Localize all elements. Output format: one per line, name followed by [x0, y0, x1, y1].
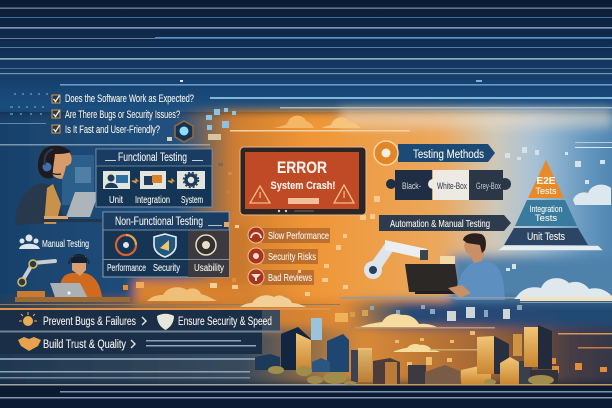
robot arm — [17, 260, 55, 299]
puzzle piece: grey-box: Grey-Box — [476, 181, 501, 191]
icon: bug burst — [19, 312, 37, 326]
puzzle: testing methods — [386, 170, 511, 200]
pyramid tier: integration: Integration — [530, 204, 562, 215]
icon: handshake — [18, 337, 41, 351]
checklist item 3 — [52, 124, 160, 136]
pyramid: test levels — [499, 160, 602, 250]
checklist item 2: Are There Bugs or Security Issues? — [65, 109, 180, 121]
data squares: center — [232, 196, 380, 296]
risk: bad reviews: Bad Reviews — [268, 272, 312, 284]
icon: performance gauge — [116, 235, 136, 255]
label: performance: Performance — [107, 263, 146, 274]
icon: integration — [140, 171, 166, 189]
data squares: center left — [123, 163, 236, 290]
manual testing label: Manual Testing — [42, 238, 89, 250]
manual testing label — [19, 234, 89, 250]
lower band — [0, 304, 340, 354]
label: security: Security — [153, 263, 180, 274]
pyramid tier: integration: Tests — [535, 213, 557, 224]
icon: orange gear badge — [374, 141, 398, 165]
cloud: left orange — [147, 287, 217, 301]
illustration: woman with headset at laptop — [15, 146, 102, 225]
puzzle piece: white-box: White-Box — [437, 181, 467, 191]
automation and manual testing banner — [379, 215, 511, 231]
label: usability: Usability — [194, 263, 224, 274]
benefit: prevent bugs and failures — [19, 312, 146, 328]
heading: functional testing: Functional Testing — [118, 152, 187, 164]
benefit: ensure security and speed: Ensure Security & Speed — [178, 316, 272, 328]
icon: security shield — [154, 234, 176, 257]
label: integration: Integration — [135, 195, 170, 206]
testing methods banner: Testing Methods — [413, 149, 484, 161]
trees — [268, 366, 554, 385]
data squares: lower — [335, 305, 522, 322]
pyramid tier: integration — [515, 200, 577, 226]
cloud: city — [394, 344, 440, 352]
error screen — [240, 147, 366, 215]
checklist item 1 — [52, 93, 194, 105]
illustration: robot arm and laptop — [364, 240, 471, 294]
icon: hexagon chip and data squares — [167, 108, 236, 142]
chevron — [131, 340, 135, 348]
benefit: build trust and quality: Build Trust & Quality — [43, 339, 126, 351]
panel: functional testing — [96, 149, 212, 207]
chevron — [142, 317, 146, 325]
data squares: right — [505, 142, 612, 271]
laptop — [405, 264, 459, 292]
clouds: top orange — [230, 116, 410, 132]
icon: warning left — [250, 186, 270, 203]
icon: unit — [103, 171, 130, 189]
puzzle piece: black-box: Black- — [402, 181, 421, 191]
risk: slow performance: Slow Performance — [268, 230, 329, 242]
label: system: System — [181, 195, 203, 206]
lower right rules — [340, 297, 612, 348]
question checklist — [52, 93, 194, 136]
clouds: right — [514, 185, 612, 301]
benefit: build trust and quality — [18, 337, 135, 351]
label: unit: Unit — [109, 195, 123, 206]
icon: system gear — [177, 171, 205, 189]
testing methods banner — [374, 141, 495, 165]
pyramid tier: e2e: E2E — [537, 176, 556, 187]
buildings: center and right — [268, 325, 558, 385]
robot arm — [364, 240, 428, 279]
benefit: ensure security and speed — [157, 314, 272, 330]
pyramid tier: e2e — [528, 160, 564, 198]
automation and manual testing banner: Automation & Manual Testing — [390, 218, 490, 230]
blue band rule — [0, 144, 210, 146]
cloud: lower center orange — [240, 295, 306, 307]
risk: security risks: Security Risks — [268, 251, 316, 263]
pyramid tier: unit: Unit Tests — [527, 231, 565, 243]
desk — [15, 297, 130, 302]
benefit: prevent bugs and failures: Prevent Bugs & Failures — [43, 316, 136, 328]
icon: warning right — [334, 185, 354, 203]
cityscape — [255, 318, 612, 386]
checklist item 2 — [52, 109, 180, 121]
illustration: tester in orange with robot arm — [17, 254, 102, 300]
cloud: lower center — [360, 314, 439, 328]
checklist item 3: Is It Fast and User-Friendly? — [65, 124, 160, 136]
dot grid — [0, 93, 48, 124]
checklist item 1: Does the Software Work as Expected? — [65, 93, 194, 105]
text: system crash: System Crash! — [270, 180, 336, 192]
arrow: unit to integration — [132, 179, 138, 183]
illustration: man at laptop — [448, 233, 505, 300]
icon: shield — [157, 314, 174, 330]
bottom left speed lines — [0, 340, 612, 398]
panel: non-functional testing — [103, 212, 229, 277]
arrow: integration to system — [168, 179, 174, 183]
heading: error: ERROR — [277, 158, 327, 177]
data squares: city — [395, 331, 607, 373]
icon: usability dial — [196, 235, 216, 255]
list: risks — [248, 227, 330, 285]
header speed lines — [0, 8, 612, 108]
icon: people — [19, 234, 40, 249]
pyramid tier: e2e: Tests — [535, 186, 557, 196]
heading: non-functional testing: Non-Functional Testing — [115, 216, 203, 228]
buildings: left — [255, 318, 400, 385]
